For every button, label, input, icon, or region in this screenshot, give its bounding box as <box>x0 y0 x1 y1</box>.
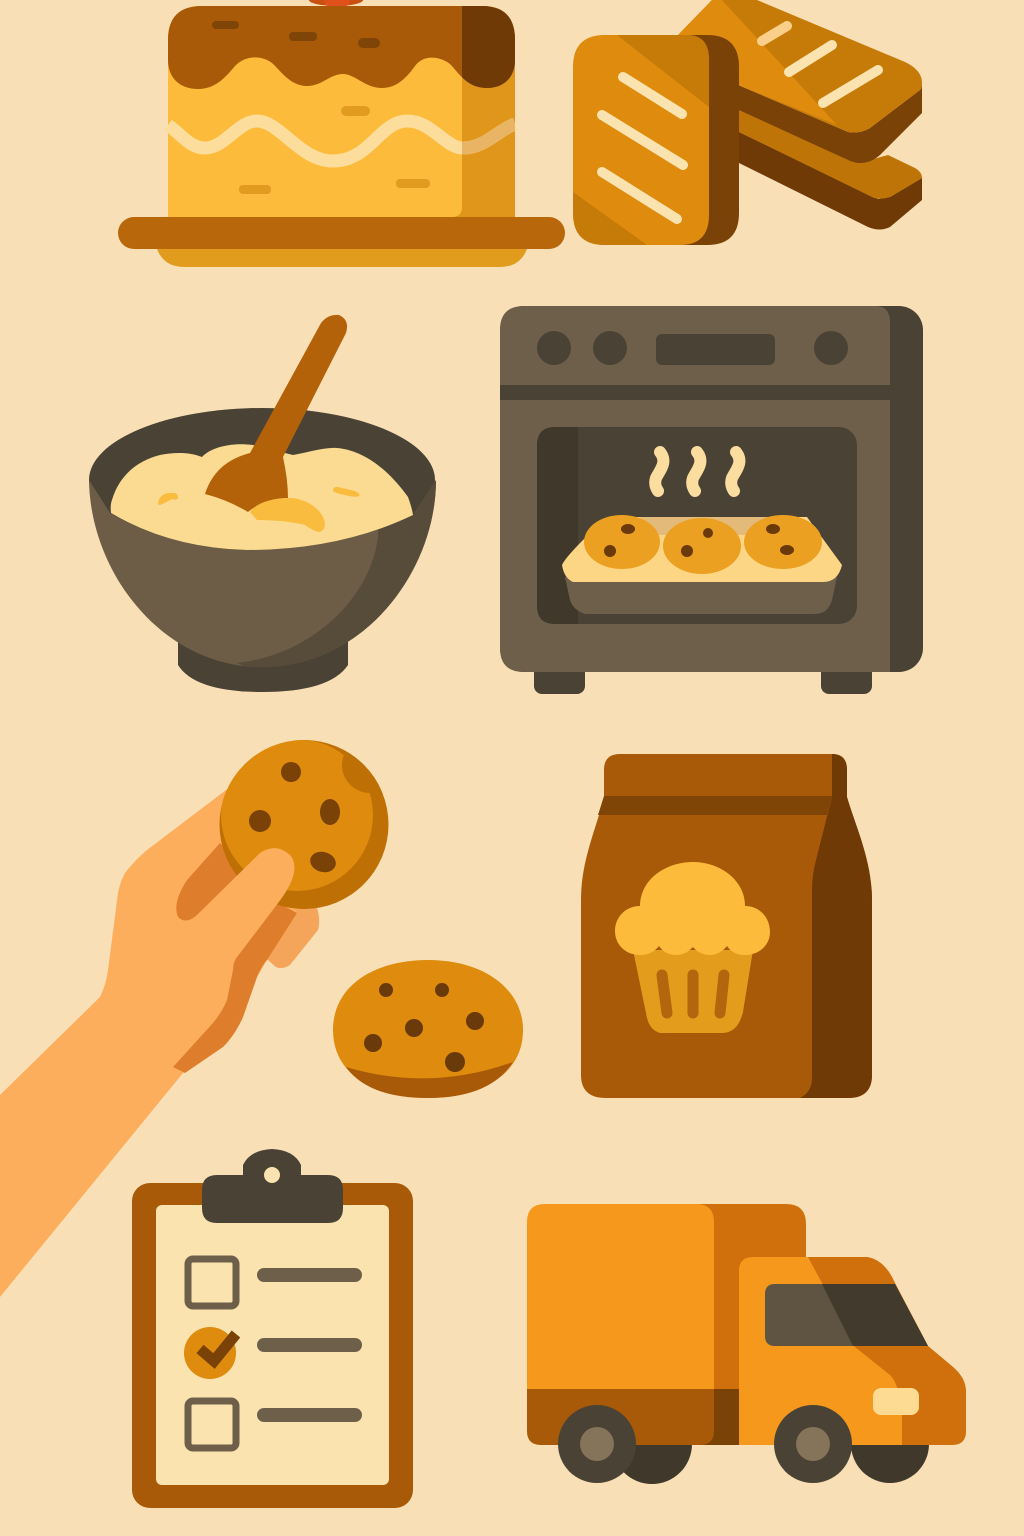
icon: muffin mix bag <box>581 754 872 1098</box>
icon: layered cake on plate <box>118 0 565 267</box>
icon: hand holding cookie <box>0 737 398 1297</box>
icon: checklist clipboard <box>132 1149 413 1508</box>
icon: oven with cookies <box>500 306 923 694</box>
icon: mixing bowl with spoon <box>89 315 440 692</box>
icon: delivery truck <box>527 1204 966 1484</box>
icon: bread slices <box>573 0 922 245</box>
icon: chocolate chip cookie <box>333 960 523 1098</box>
